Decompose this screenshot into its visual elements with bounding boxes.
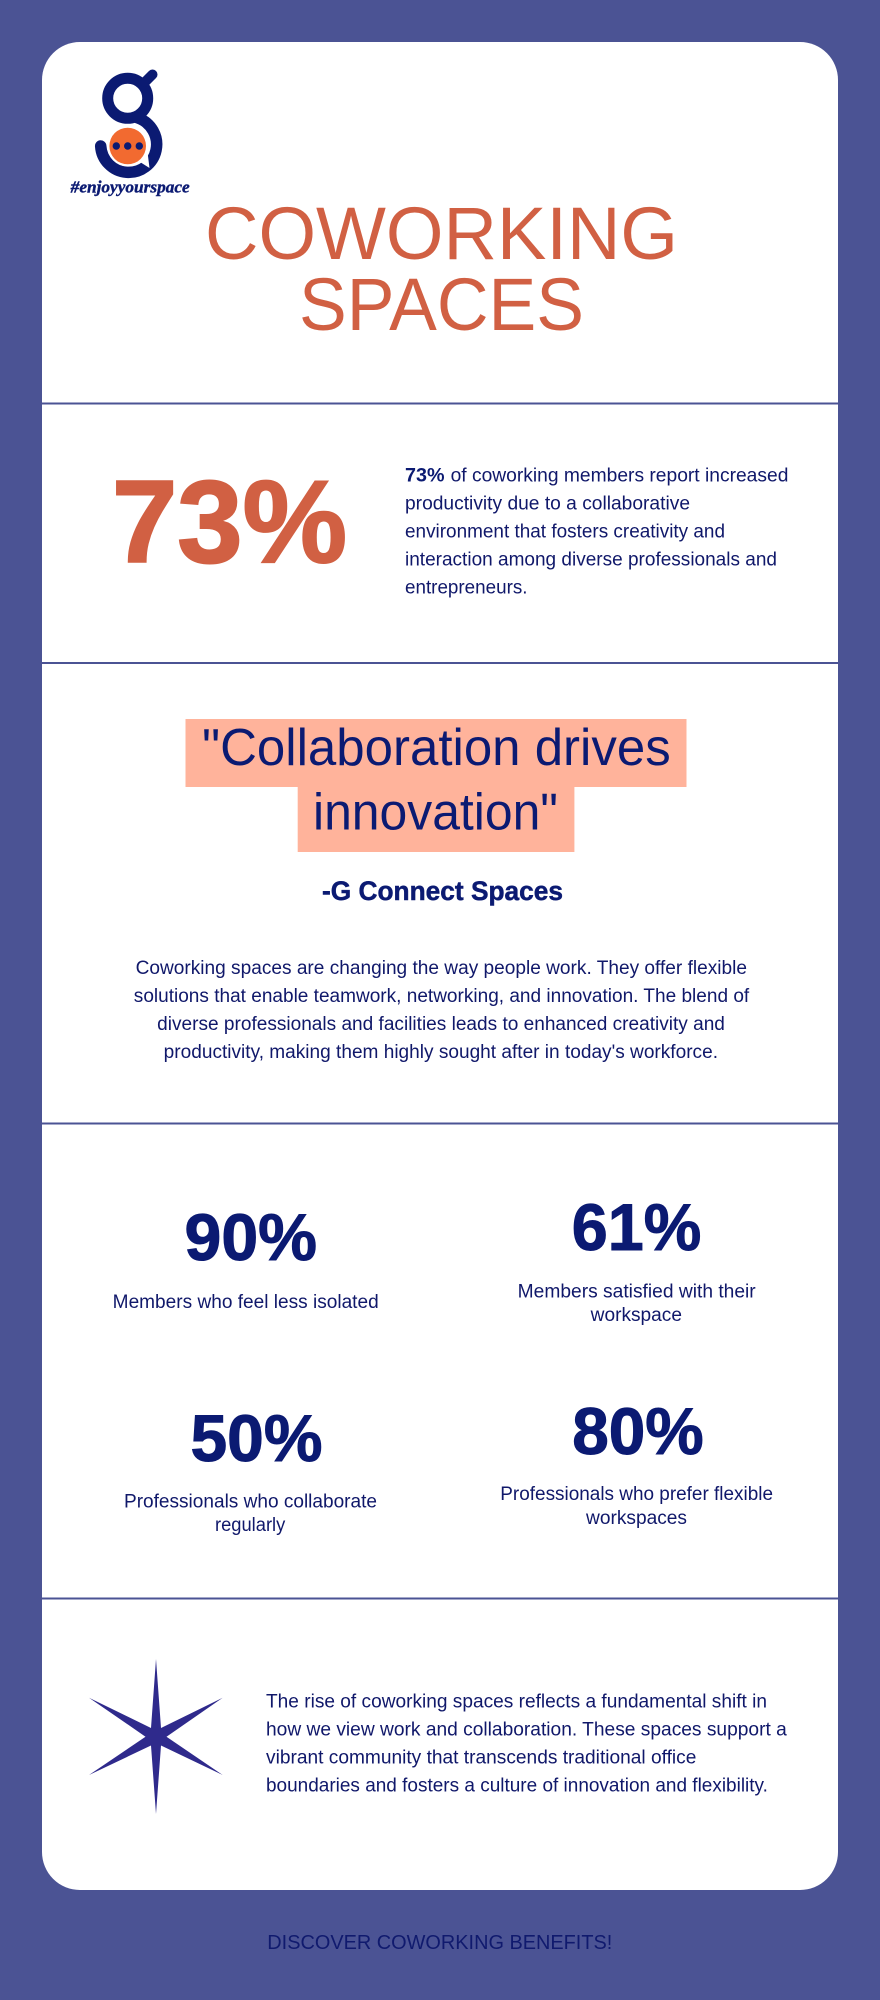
icon: g logo with speech bubble: #enjoyyourspace <box>70 178 190 196</box>
stat: 61%: 61% <box>572 1190 701 1264</box>
text block: productivity statistic: interaction among diverse professionals and <box>405 549 777 570</box>
text block: intro paragraph: solutions that enable teamwork, networking, and innovation. The blend of <box>134 986 750 1007</box>
text block: conclusion <box>266 1692 787 1797</box>
quote highlight: "Collaboration drives <box>202 719 671 777</box>
icon: g logo with speech bubble <box>70 74 190 196</box>
big stat: 73%: 73% <box>112 456 347 587</box>
stat: 50%: Professionals who collaborate <box>124 1491 377 1512</box>
icon: six-point star <box>89 1659 223 1814</box>
title: COWORKING <box>205 192 678 275</box>
stat: 80% <box>500 1394 773 1529</box>
stat: 50%: regularly <box>215 1515 286 1536</box>
stat: 90%: Members who feel less isolated <box>113 1292 379 1313</box>
stat: 61%: workspace <box>590 1305 682 1326</box>
text block: productivity statistic: productivity due to a collaborative <box>405 493 690 514</box>
quote highlight: innovation" <box>313 783 558 841</box>
text block: intro paragraph <box>134 958 750 1063</box>
text block: conclusion: boundaries and fosters a culture of innovation and flexibility. <box>266 1776 768 1797</box>
footer call to action: DISCOVER COWORKING BENEFITS! <box>267 1932 612 1954</box>
text block: intro paragraph: diverse professionals and facilities leads to enhanced creativity and <box>157 1014 725 1035</box>
stat: 50% <box>124 1401 377 1536</box>
quote attribution: -G Connect Spaces <box>322 876 563 906</box>
text block: productivity statistic: environment that fosters creativity and <box>405 521 725 542</box>
text block: productivity statistic: 73% <box>405 465 445 486</box>
text block: conclusion: how we view work and collaboration. These spaces support a <box>266 1720 787 1741</box>
quote highlight <box>186 719 686 852</box>
stat: 90% <box>113 1200 379 1313</box>
text block: productivity statistic: of coworking members report increased <box>451 465 788 486</box>
stat: 50%: 50% <box>190 1401 322 1475</box>
text block: intro paragraph: productivity, making them highly sought after in today's workforce. <box>164 1042 718 1063</box>
stat: 61% <box>518 1190 756 1326</box>
stat: 61%: Members satisfied with their <box>518 1281 756 1302</box>
stat: 80%: workspaces <box>585 1508 687 1529</box>
stat: 80%: Professionals who prefer flexible <box>500 1484 773 1505</box>
text block: productivity statistic: entrepreneurs. <box>405 577 528 598</box>
text block: conclusion: vibrant community that transcends traditional office <box>266 1748 696 1769</box>
title: SPACES <box>299 263 584 346</box>
text block: productivity statistic <box>405 465 788 598</box>
stat: 90%: 90% <box>184 1200 317 1274</box>
title <box>205 192 678 346</box>
text block: intro paragraph: Coworking spaces are changing the way people work. They offer flexible <box>136 958 747 979</box>
text block: conclusion: The rise of coworking spaces reflects a fundamental shift in <box>266 1692 767 1713</box>
stat: 80%: 80% <box>572 1394 704 1468</box>
